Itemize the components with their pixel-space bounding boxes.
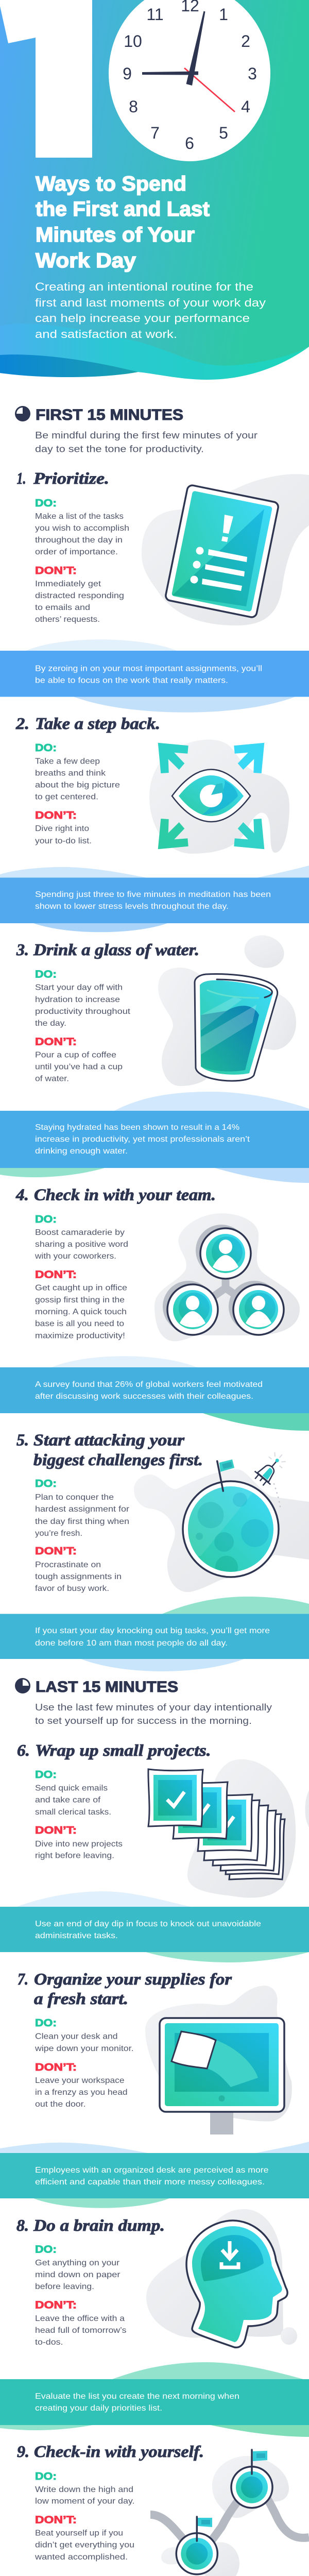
do: DO: xyxy=(35,1478,57,1489)
subtitle: first and last moments of your work day xyxy=(35,296,266,309)
milestone 2 xyxy=(231,2450,272,2508)
dont: in a frenzy as you head xyxy=(35,2088,128,2097)
callout: 3 fact xyxy=(0,1092,309,1183)
dont: gossip first thing in the xyxy=(35,1296,125,1304)
sheet 1 xyxy=(148,1769,203,1826)
hero gradient background xyxy=(0,0,309,368)
text block: first 15 intro xyxy=(35,430,258,454)
text block: last 15 intro: Use the last few minutes of your day intentionally xyxy=(35,1702,272,1713)
do: DO: xyxy=(35,2018,57,2029)
callout: 2 fact: Spending just three to five minutes in meditation has been xyxy=(35,890,271,899)
dont: of water. xyxy=(35,1075,69,1083)
heading: 1. xyxy=(16,469,26,487)
do: you’re fresh. xyxy=(35,1529,82,1538)
dont: until you’ve had a cup xyxy=(35,1062,123,1072)
dont: head full of tomorrow’s xyxy=(35,2326,127,2335)
callout: 2 fact: shown to lower stress levels throughout the day. xyxy=(35,902,229,911)
heading: Prioritize. xyxy=(33,469,109,487)
callout: 2 fact xyxy=(0,866,309,932)
callout: 5 fact: done before 10 am than most people do all day. xyxy=(35,1639,228,1648)
icon: clock: 4 xyxy=(241,97,250,116)
dont: out the door. xyxy=(35,2100,85,2109)
dont: right before leaving. xyxy=(35,1852,114,1860)
panel: 9 check in with yourself xyxy=(17,2442,309,2576)
do: DO: xyxy=(35,2244,57,2256)
heading: 6. xyxy=(17,1741,30,1759)
do: Take a few deep xyxy=(35,757,100,766)
heading: Organize your supplies for xyxy=(34,1970,232,1988)
icon: rocket xyxy=(251,1448,290,1489)
callout: 5 fact xyxy=(0,1597,309,1671)
do: DO: xyxy=(35,498,57,509)
callout: 5 fact: If you start your day knocking out big tasks, you’ll get more xyxy=(35,1626,270,1635)
do: DO: xyxy=(35,969,57,980)
text block: first 15 intro: day to set the tone for productivity. xyxy=(35,444,204,454)
dont xyxy=(35,810,92,845)
heading xyxy=(16,1430,203,1469)
do: and take care of xyxy=(35,1796,101,1804)
do xyxy=(35,1769,111,1817)
dont: to-dos. xyxy=(35,2338,63,2347)
panel: 5 biggest challenges xyxy=(16,1430,309,1593)
dont xyxy=(35,1546,122,1593)
callout: 4 fact xyxy=(0,1356,309,1431)
do: Send quick emails xyxy=(35,1784,108,1793)
dont: DON’T: xyxy=(35,1546,77,1557)
callout: 7 fact xyxy=(0,2142,309,2208)
title xyxy=(36,173,210,272)
dont: DON’T: xyxy=(35,1037,77,1048)
do: DO: xyxy=(35,2471,57,2482)
dont xyxy=(35,2514,134,2562)
sheet 2 xyxy=(173,1782,228,1839)
subtitle: can help increase your performance xyxy=(35,312,250,325)
do: the day first thing when xyxy=(35,1517,129,1526)
dont: DON’T: xyxy=(35,2300,77,2311)
text block: last 15 intro xyxy=(35,1702,272,1726)
panel: 6 wrap up small projects xyxy=(17,1741,309,1897)
dont: Beat yourself up if you xyxy=(35,2529,123,2538)
panel: 7 organize supplies xyxy=(18,1970,292,2134)
do: low moment of your day. xyxy=(35,2497,135,2506)
callout: 8 fact xyxy=(0,2362,309,2437)
dont: distracted responding xyxy=(35,591,124,600)
icon: clock: 11 xyxy=(146,5,164,24)
callout: 7 fact: Employees with an organized desk are perceived as more xyxy=(35,2166,269,2175)
heading: 8. xyxy=(16,2216,29,2234)
callout: 4 fact: A survey found that 26% of global workers feel motivated xyxy=(35,1380,263,1389)
do: wipe down your monitor. xyxy=(35,2044,134,2053)
dont xyxy=(35,1037,123,1083)
icon: milestone path with flags xyxy=(150,2450,309,2576)
do: Write down the high and xyxy=(35,2485,133,2494)
person left xyxy=(167,1284,218,1335)
icon: clock: 10 xyxy=(124,32,142,50)
do xyxy=(35,2244,121,2291)
do: order of importance. xyxy=(35,548,118,556)
icon: clock: 9 xyxy=(123,64,132,83)
heading: Do a brain dump. xyxy=(33,2216,165,2234)
dont: your to-do list. xyxy=(35,837,92,845)
do xyxy=(35,1214,128,1261)
dont: Dive into new projects xyxy=(35,1840,123,1849)
text block: last 15 intro: to set yourself up for success in the morning. xyxy=(35,1716,252,1726)
icon: glass of water xyxy=(158,931,296,1086)
panel: 3 drink water xyxy=(16,931,296,1086)
do xyxy=(35,2018,134,2053)
icon: stack of checked papers xyxy=(148,1759,309,1897)
heading: a fresh start. xyxy=(34,1989,128,2008)
heading: Start attacking your xyxy=(33,1430,185,1449)
dont: base is all you need to xyxy=(35,1319,124,1328)
do: Plan to conquer the xyxy=(35,1493,114,1502)
icon: head with download arrow xyxy=(146,2209,297,2347)
dont: Leave your workspace xyxy=(35,2076,125,2085)
heading xyxy=(18,1970,232,2008)
dont xyxy=(35,1269,127,1341)
dont: Dive right into xyxy=(35,824,89,833)
do xyxy=(35,2471,135,2506)
dont: to emails and xyxy=(35,603,90,612)
dont: DON’T: xyxy=(35,1269,77,1281)
icon: clock xyxy=(109,0,270,161)
dont: DON’T: xyxy=(35,1825,77,1836)
heading: Check-in with yourself. xyxy=(34,2442,204,2461)
icon: clock: 3 xyxy=(248,64,257,83)
dont: Get caught up in office xyxy=(35,1284,127,1292)
icon: clock: 1 xyxy=(219,5,228,24)
title: Work Day xyxy=(36,249,136,272)
do: DO: xyxy=(35,1769,57,1781)
hero wave: light layer xyxy=(0,324,309,380)
callout: 6 fact xyxy=(0,1891,309,1962)
heading: 7. xyxy=(18,1970,28,1988)
dont: wanted accomplished. xyxy=(35,2553,128,2562)
dont xyxy=(35,2062,128,2109)
dont xyxy=(35,565,124,624)
icon: clock: 2 xyxy=(241,32,250,50)
subtitle xyxy=(35,280,266,341)
dont: DON’T: xyxy=(35,2062,77,2073)
do: mind down on paper xyxy=(35,2270,121,2279)
callout: 3 fact: drinking enough water. xyxy=(35,1147,128,1156)
icon: team network xyxy=(154,1213,300,1341)
milestone 1 xyxy=(176,2517,217,2574)
heading: biggest challenges first. xyxy=(33,1450,203,1469)
do: with your coworkers. xyxy=(35,1252,116,1261)
heading: Take a step back. xyxy=(35,714,160,733)
callout: 6 fact: Use an end of day dip in focus to knock out unavoidable xyxy=(35,1920,261,1928)
do: Start your day off with xyxy=(35,983,123,992)
callout: 8 fact: creating your daily priorities list. xyxy=(35,2404,162,2413)
icon: clock: 5 xyxy=(219,124,228,142)
hero wave: dark layer xyxy=(0,354,138,377)
title: Ways to Spend xyxy=(36,173,186,195)
panel: 8 brain dump xyxy=(16,2209,297,2347)
sheet 3 xyxy=(198,1794,252,1851)
do: breaths and think xyxy=(35,769,106,778)
title: Minutes of Your xyxy=(36,224,195,246)
do xyxy=(35,1478,130,1538)
do: Make a list of the tasks xyxy=(35,512,124,521)
do: productivity throughout xyxy=(35,1007,131,1016)
dont: Immediately get xyxy=(35,580,101,588)
big numeral one xyxy=(0,0,92,158)
dont xyxy=(35,2300,127,2347)
text block: first 15 intro: Be mindful during the first few minutes of your xyxy=(35,430,258,440)
panel: 2 take a step back xyxy=(15,714,289,854)
do: hydration to increase xyxy=(35,995,120,1004)
dont: others’ requests. xyxy=(35,615,100,624)
icon: priority tablet xyxy=(142,474,309,625)
icon: clock: 8 xyxy=(129,97,138,116)
callout: 7 fact: efficient and capable than their more messy colleagues. xyxy=(35,2178,265,2187)
panel: 1 prioritize xyxy=(16,469,309,625)
heading: 9. xyxy=(17,2442,29,2461)
icon: clock: 7 xyxy=(150,124,160,142)
person top xyxy=(200,1228,251,1279)
subtitle: and satisfaction at work. xyxy=(35,328,177,341)
subtitle: Creating an intentional routine for the xyxy=(35,280,253,293)
icon: eye with arrows xyxy=(149,739,289,854)
do: Boost camaraderie by xyxy=(35,1228,125,1237)
dont: Procrastinate on xyxy=(35,1561,101,1569)
do: hardest assignment for xyxy=(35,1505,130,1514)
heading: 3. xyxy=(16,940,29,959)
callout: 1 fact: By zeroing in on your most important assignments, you’ll xyxy=(35,665,262,673)
callout: 1 fact xyxy=(0,639,309,713)
dont: Pour a cup of coffee xyxy=(35,1051,116,1059)
callout: 4 fact: after discussing work successes with their colleagues. xyxy=(35,1392,253,1401)
dont: maximize productivity! xyxy=(35,1331,125,1341)
do: to get centered. xyxy=(35,792,98,802)
callout: 1 fact: be able to focus on the work that really matters. xyxy=(35,676,228,685)
heading: Check in with your team. xyxy=(34,1185,216,1204)
dont xyxy=(35,1825,123,1860)
title: the First and Last xyxy=(36,198,210,221)
dont: Leave the office with a xyxy=(35,2314,125,2323)
dont: DON’T: xyxy=(35,810,77,821)
icon: clock: 6 xyxy=(185,134,194,152)
callout: 6 fact: administrative tasks. xyxy=(35,1931,118,1940)
do: DO: xyxy=(35,1214,57,1225)
do: small clerical tasks. xyxy=(35,1808,111,1817)
panel: hero header xyxy=(0,0,309,380)
callout: 3 fact: Staying hydrated has been shown to result in a 14% xyxy=(35,1123,239,1132)
dont: didn’t get everything you xyxy=(35,2541,134,2549)
do xyxy=(35,742,120,802)
dont: DON’T: xyxy=(35,2514,77,2526)
panel: 4 check in with your team xyxy=(15,1185,300,1341)
do: Get anything on your xyxy=(35,2259,120,2267)
do: DO: xyxy=(35,742,57,754)
do: the day. xyxy=(35,1019,66,1028)
icon: planet with flag and rocket xyxy=(134,1448,309,1592)
do: sharing a positive word xyxy=(35,1240,128,1249)
do xyxy=(35,498,129,556)
callout: 8 fact: Evaluate the list you create the next morning when xyxy=(35,2392,239,2401)
heading: 2. xyxy=(15,714,29,733)
do xyxy=(35,969,131,1028)
heading: 5. xyxy=(16,1430,29,1449)
do: before leaving. xyxy=(35,2282,94,2291)
do: you wish to accomplish xyxy=(35,524,129,533)
icon: monitor with paper xyxy=(145,1986,292,2134)
heading: Drink a glass of water. xyxy=(33,940,199,959)
person right xyxy=(233,1284,284,1335)
dont: morning. A quick touch xyxy=(35,1308,127,1316)
heading: last 15 minutes: LAST 15 MINUTES xyxy=(36,1679,178,1696)
do: about the big picture xyxy=(35,781,120,789)
heading: first 15 minutes: FIRST 15 MINUTES xyxy=(36,406,183,423)
dont: DON’T: xyxy=(35,565,77,577)
dont: tough assignments in xyxy=(35,1572,122,1581)
callout: 3 fact: increase in productivity, yet most professionals aren’t xyxy=(35,1135,250,1144)
heading: 4. xyxy=(15,1185,29,1204)
heading: Wrap up small projects. xyxy=(35,1741,211,1759)
do: Clean your desk and xyxy=(35,2032,117,2041)
do: throughout the day in xyxy=(35,536,123,545)
dont: favor of busy work. xyxy=(35,1584,109,1593)
icon: three-quarter pie clock xyxy=(15,1678,30,1693)
icon: quarter pie clock xyxy=(15,406,30,421)
